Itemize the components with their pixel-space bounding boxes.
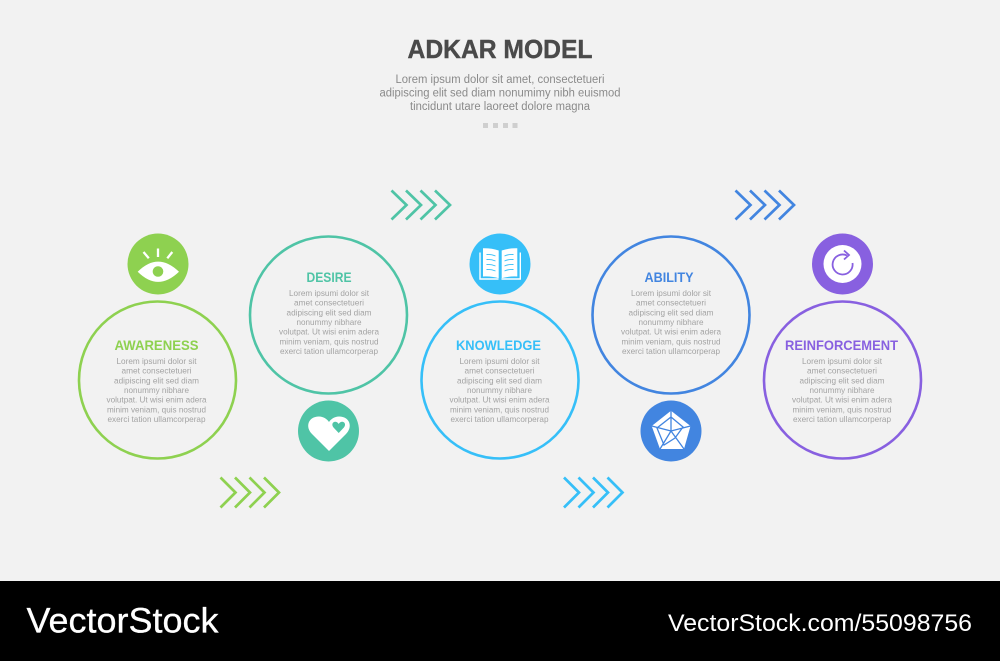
text: reinforcement body: exerci tation ullamcorperap: [793, 414, 891, 424]
panel: ability: [592, 236, 750, 394]
text: knowledge body: Lorem ipsumi dolor sit: [460, 356, 540, 366]
panel: awareness: [79, 302, 236, 458]
subtitle text block: [380, 74, 620, 113]
text: awareness body: exerci tation ullamcorperap: [108, 414, 206, 424]
text: knowledge body: amet consectetueri: [464, 366, 535, 376]
text: awareness body: Lorem ipsumi dolor sit: [116, 356, 197, 366]
arrow: teal chevrons: [392, 190, 450, 220]
text: knowledge body: minim veniam, quis nostrud: [450, 404, 549, 414]
text: ability body: nonummy nibhare: [638, 317, 704, 327]
text: desire body: minim veniam, quis nostrud: [280, 336, 379, 346]
text: desire body: Lorem ipsumi dolor sit: [289, 288, 370, 298]
text: knowledge body: exerci tation ullamcorperap: [450, 414, 549, 424]
text: ability body: volutpat. Ut wisi enim adera: [621, 327, 721, 337]
text: knowledge body: [450, 356, 550, 424]
title dots: [483, 123, 518, 128]
text: reinforcement body: Lorem ipsumi dolor sit: [802, 356, 883, 366]
footer bar: [0, 581, 1000, 661]
text: reinforcement body: [792, 356, 892, 424]
text: desire body: amet consectetueri: [294, 298, 364, 308]
text: reinforcement body: amet consectetueri: [807, 366, 877, 376]
heading: awareness: AWARENESS: [114, 337, 198, 353]
text: knowledge body: volutpat. Ut wisi enim adera: [450, 395, 550, 405]
icon: radar pentagon: [640, 400, 702, 462]
text: desire body: exerci tation ullamcorperap: [280, 346, 378, 356]
icon: refresh: [812, 234, 873, 294]
footer url: VectorStock.com/55098756: [668, 610, 972, 637]
heading: reinforcement: REINFORCEMENT: [785, 337, 898, 353]
footer logo: VectorStock: [26, 602, 219, 640]
heading: desire: DESIRE: [306, 269, 352, 285]
text: ability body: adipiscing elit sed diam: [628, 307, 714, 317]
arrow: sky blue chevrons: [564, 478, 622, 508]
text: reinforcement body: minim veniam, quis nostrud: [792, 404, 892, 414]
text: awareness body: amet consectetueri: [122, 366, 192, 376]
panel: knowledge: [422, 302, 578, 458]
heading: ability: ABILITY: [644, 269, 694, 285]
subtitle text block: adipiscing elit sed diam nonumimy nibh euismod: [380, 88, 620, 100]
text: awareness body: minim veniam, quis nostrud: [107, 404, 206, 414]
text: reinforcement body: nonummy nibhare: [810, 385, 875, 395]
panel: desire: [250, 236, 407, 394]
heading: knowledge: KNOWLEDGE: [456, 337, 541, 353]
text: awareness body: [106, 356, 207, 424]
title: ADKAR MODEL: [408, 34, 593, 64]
icon: eye: [128, 234, 188, 294]
text: reinforcement body: volutpat. Ut wisi enim adera: [792, 395, 892, 405]
arrow: green chevrons: [220, 478, 279, 508]
text: knowledge body: adipiscing elit sed diam: [457, 375, 542, 385]
text: ability body: exerci tation ullamcorperap: [622, 346, 720, 356]
text: reinforcement body: adipiscing elit sed diam: [800, 375, 884, 385]
text: ability body: Lorem ipsumi dolor sit: [631, 288, 712, 298]
text: ability body: minim veniam, quis nostrud: [622, 336, 721, 346]
subtitle text block: tincidunt utare laoreet dolore magna: [410, 101, 591, 113]
panel: reinforcement: [764, 302, 921, 458]
text: awareness body: nonummy nibhare: [124, 385, 189, 395]
icon: heart: [298, 400, 359, 462]
text: knowledge body: nonummy nibhare: [467, 385, 532, 395]
text: desire body: adipiscing elit sed diam: [286, 307, 372, 317]
text: desire body: volutpat. Ut wisi enim adera: [279, 327, 379, 337]
icon: open book: [470, 234, 530, 294]
text: awareness body: volutpat. Ut wisi enim adera: [106, 395, 207, 405]
text: ability body: [621, 288, 721, 356]
text: ability body: amet consectetueri: [636, 298, 706, 308]
text: desire body: [279, 288, 379, 356]
arrow: blue chevrons: [736, 190, 794, 220]
subtitle text block: Lorem ipsum dolor sit amet, consectetueri: [396, 74, 604, 86]
text: desire body: nonummy nibhare: [296, 317, 362, 327]
text: awareness body: adipiscing elit sed diam: [114, 375, 199, 385]
